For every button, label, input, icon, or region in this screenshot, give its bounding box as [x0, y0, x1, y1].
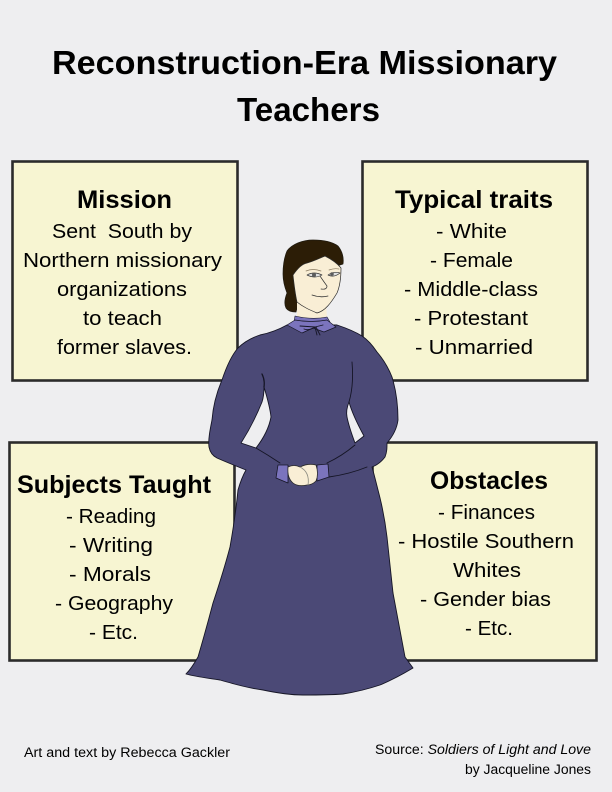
collar [287, 320, 336, 333]
text: mission description: to teach [83, 307, 162, 330]
credit: art and text: Art and text by Rebecca Gackler [24, 745, 231, 760]
list: subjects: - Reading [66, 505, 156, 528]
heading: typical traits: Typical traits [395, 186, 553, 214]
eye: right [328, 272, 340, 276]
panel: mission [12, 162, 238, 380]
panel: typical traits [362, 162, 588, 380]
hair [283, 240, 343, 312]
nose [320, 276, 327, 289]
panel: obstacles [372, 442, 596, 660]
list: subjects: - Etc. [89, 621, 138, 644]
list: traits: - Protestant [414, 307, 528, 330]
credit: source: by Jacqueline Jones [465, 762, 591, 777]
mouth [312, 295, 328, 297]
text: mission description: former slaves. [57, 336, 192, 359]
face [293, 256, 341, 313]
title: Reconstruction-Era Missionary [52, 44, 558, 81]
heading: obstacles: Obstacles [430, 467, 548, 495]
arm fold line: right [349, 362, 353, 402]
title: Teachers [237, 91, 380, 128]
list: obstacles: - Finances [438, 501, 535, 524]
credit: source: Source: Soldiers of Light and Love [375, 742, 591, 757]
title [52, 44, 558, 128]
illustration: woman teacher [186, 240, 413, 695]
eyebrows [306, 269, 339, 271]
heading: mission: Mission [77, 186, 172, 214]
list: obstacles: Whites [453, 559, 521, 582]
list: subjects: - Morals [69, 563, 151, 586]
sleeve lines [256, 445, 367, 477]
collar ribbon [300, 325, 323, 335]
gap: right of waist [347, 402, 364, 443]
heading: subjects taught: Subjects Taught [17, 471, 212, 499]
cuff: left [276, 465, 288, 483]
list: subjects: - Writing [69, 534, 153, 557]
list: traits: - Unmarried [415, 336, 533, 359]
credit: source [375, 742, 591, 777]
panel: subjects taught [10, 442, 234, 660]
list: obstacles: - Gender bias [420, 588, 551, 611]
list: subjects: - Geography [55, 592, 174, 615]
text: mission description [23, 220, 223, 359]
eye: left [307, 273, 322, 277]
gap: left of waist [241, 387, 271, 448]
list: traits [404, 220, 538, 359]
list: obstacles: - Etc. [465, 617, 513, 640]
collar band [294, 316, 330, 322]
list: traits: - Female [430, 249, 513, 272]
neck [297, 298, 327, 318]
hands [288, 464, 318, 486]
list: obstacles: - Hostile Southern [398, 530, 574, 553]
dress [186, 325, 413, 695]
text: mission description: Sent South by [52, 220, 193, 243]
arm fold line: left [262, 374, 264, 387]
list: subjects [55, 505, 174, 644]
list: obstacles [398, 501, 574, 640]
cuff: right [317, 464, 329, 481]
text: mission description: Northern missionary [23, 249, 223, 272]
text: mission description: organizations [57, 278, 187, 301]
list: traits: - White [436, 220, 507, 243]
list: traits: - Middle-class [404, 278, 538, 301]
